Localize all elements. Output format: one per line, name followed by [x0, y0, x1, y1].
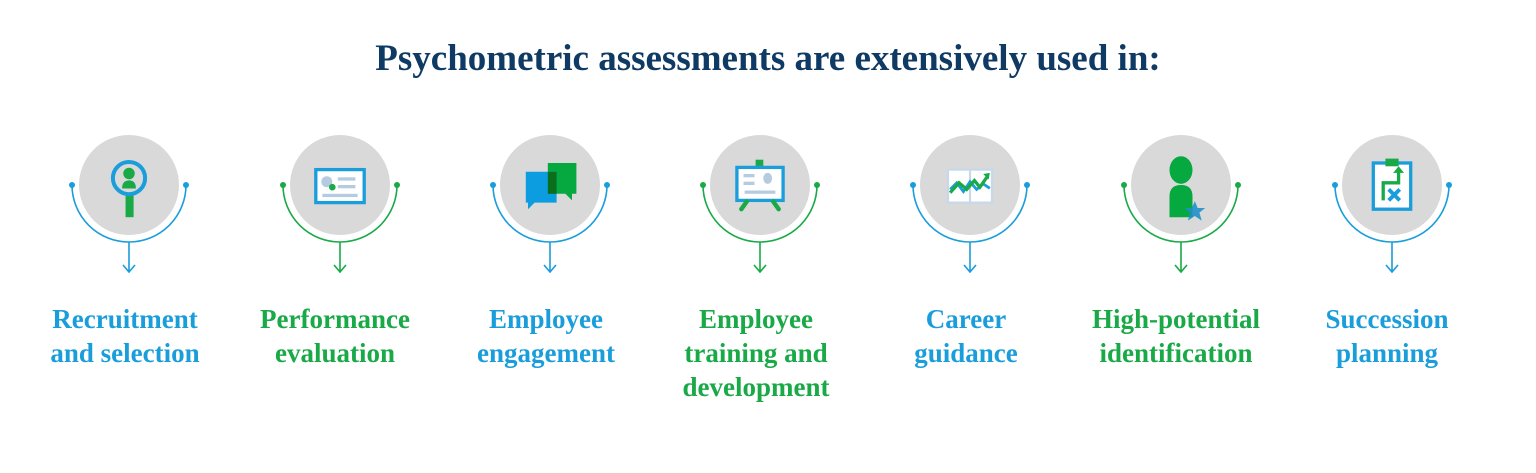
item: performance — [280, 135, 400, 272]
label: career: guidance — [914, 338, 1018, 368]
label: training: training and — [684, 338, 828, 368]
title: Psychometric assessments are extensively used in: — [375, 38, 1161, 79]
icon: chart — [948, 170, 992, 203]
label: engagement: engagement — [477, 338, 615, 368]
label: high-potential: High-potential — [1092, 304, 1260, 334]
label: recruitment: and selection — [50, 338, 200, 368]
icon: chat bubbles — [526, 163, 576, 209]
label: succession: Succession — [1325, 304, 1449, 334]
label: training: Employee — [699, 304, 813, 334]
label: recruitment: Recruitment — [52, 304, 198, 334]
label: high-potential — [1092, 304, 1260, 368]
label: engagement — [477, 304, 615, 368]
label: training — [682, 304, 830, 402]
label: recruitment — [50, 304, 200, 368]
label: succession — [1325, 304, 1449, 368]
label: engagement: Employee — [489, 304, 603, 334]
item: training — [700, 135, 820, 272]
label: performance: Performance — [260, 304, 410, 334]
item: high-potential — [1121, 135, 1241, 272]
item: career — [910, 135, 1030, 272]
icon: clipboard — [1373, 159, 1411, 209]
item: succession — [1332, 135, 1452, 272]
label: performance: evaluation — [275, 338, 395, 368]
label: career — [914, 304, 1018, 368]
icon: certificate — [316, 170, 364, 203]
label: performance — [260, 304, 410, 368]
icon: magnifier person — [113, 162, 145, 217]
label: high-potential: identification — [1100, 338, 1252, 368]
item: engagement — [490, 135, 610, 272]
icon: person star — [1170, 156, 1205, 221]
label: succession: planning — [1336, 338, 1438, 368]
icon: easel board — [737, 160, 783, 209]
item: recruitment — [69, 135, 189, 272]
label: training: development — [682, 372, 829, 402]
label: career: Career — [926, 304, 1006, 334]
